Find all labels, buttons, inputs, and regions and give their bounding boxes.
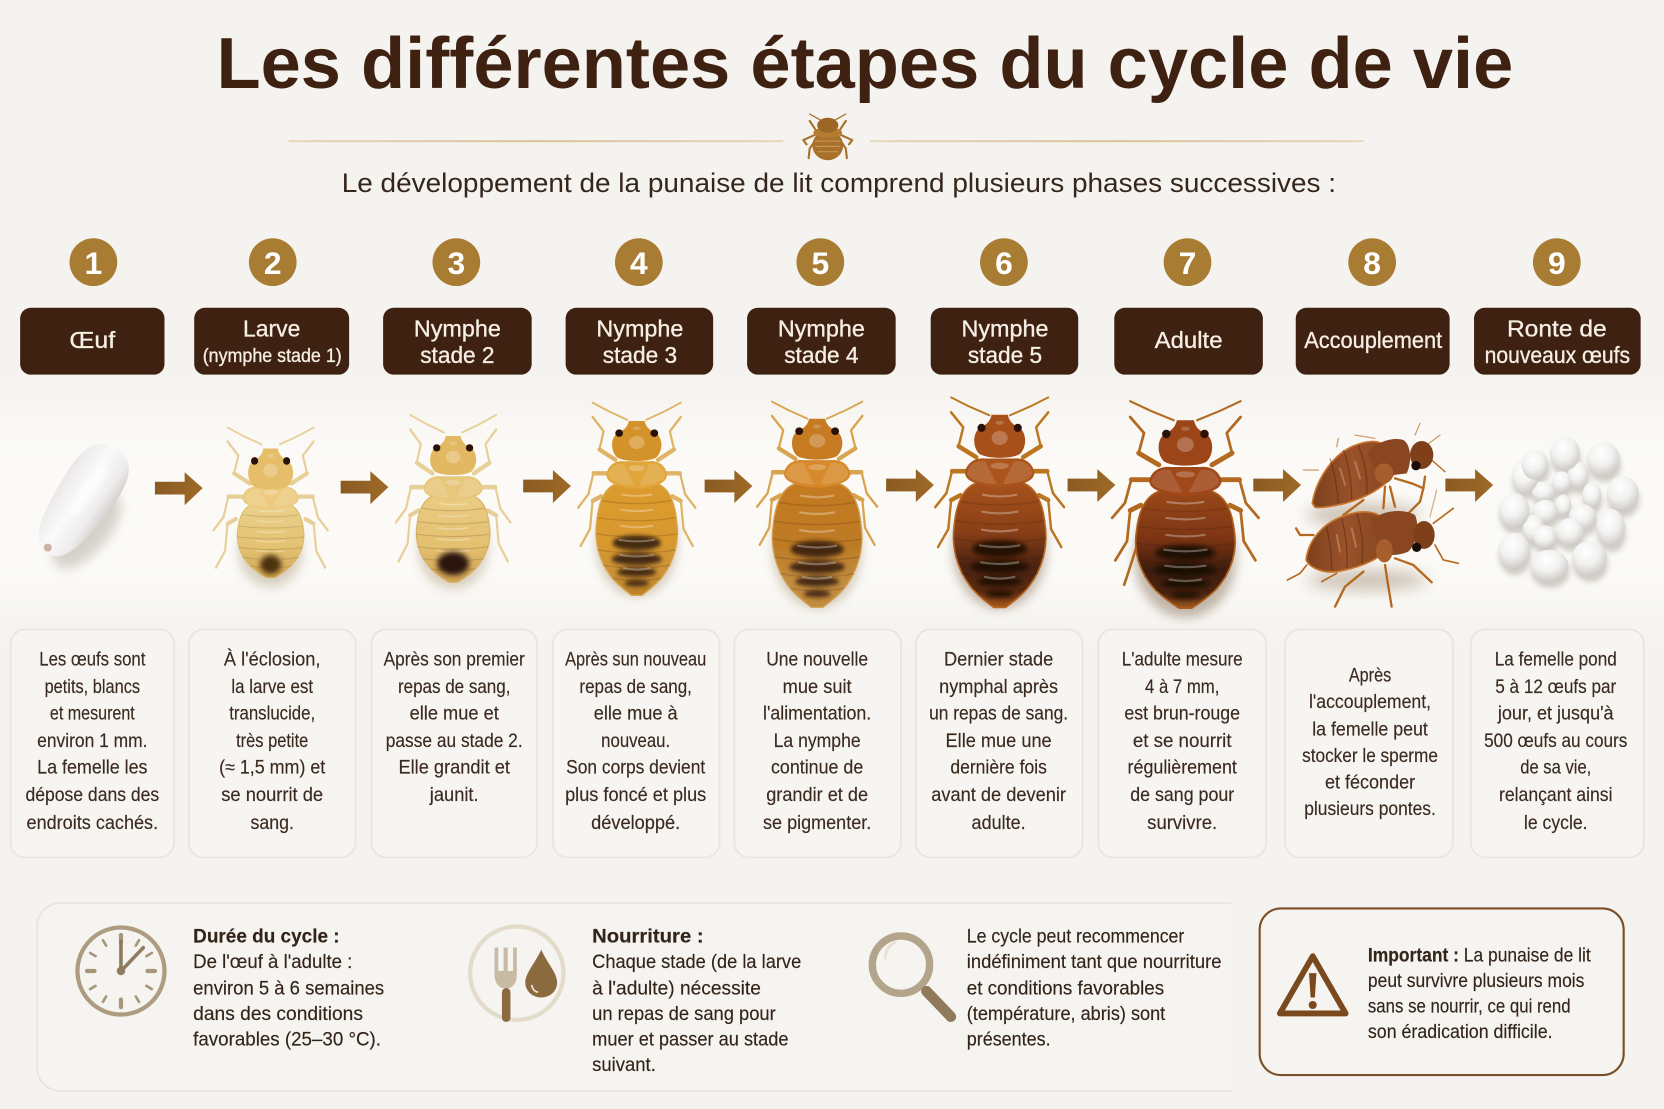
image: egg cluster <box>1498 436 1640 588</box>
panel: card nymphe stade 2: passe au stade 2. <box>386 731 523 752</box>
panel: card nymphe stade 2: jaunit. <box>429 785 479 806</box>
panel: card nymphe stade 3: Son corps devient <box>566 758 706 779</box>
label: nymphe stade 2: Nymphe <box>414 315 501 341</box>
text: nourriture: un repas de sang pour <box>592 1004 776 1025</box>
text: cycle recommence: présentes. <box>967 1029 1051 1050</box>
panel: card adulte <box>1098 629 1266 857</box>
panel: card larve: très petite <box>236 731 308 752</box>
panel: card oeuf: et mesurent <box>50 704 135 725</box>
text: important note: peut survivre plusieurs mois <box>1368 971 1584 992</box>
step numbers: 7 <box>1179 245 1196 281</box>
label: nymphe stade 5: Nymphe <box>961 315 1048 341</box>
label: adulte <box>1114 308 1263 375</box>
image: nymph stage 2 <box>396 415 510 589</box>
panel: card oeuf: Les œufs sont <box>39 649 146 670</box>
step numbers: 9 <box>1548 245 1566 281</box>
label: nymphe stade 3 <box>566 308 713 375</box>
panel: card nymphe stade 5 <box>916 629 1082 857</box>
divider with bug icon <box>289 114 1364 160</box>
panel: card nymphe stade 2 <box>371 629 537 857</box>
icon: fork and blood drop <box>470 926 564 1022</box>
label: ponte <box>1474 308 1641 375</box>
panel: card larve: (≈ 1,5 mm) et <box>219 758 326 779</box>
label: nymphe stade 4: stade 4 <box>784 342 859 368</box>
panel: card nymphe stade 3 <box>553 629 720 857</box>
panel: card nymphe stade 4: se pigmenter. <box>763 813 871 834</box>
panel: card nymphe stade 5: nymphal après <box>939 677 1058 698</box>
label: larve <box>194 308 349 375</box>
panel: card nymphe stade 2: repas de sang, <box>398 677 510 698</box>
icon: warning triangle <box>1280 956 1346 1013</box>
panel: card nymphe stade 3: plus foncé et plus <box>565 785 706 806</box>
panel: card adulte: 4 à 7 mm, <box>1145 677 1219 698</box>
image: nymph stage 4 <box>757 402 877 608</box>
panel: card larve: la larve est <box>231 677 314 698</box>
icon: magnifying glass <box>872 936 951 1017</box>
image: egg <box>23 433 140 580</box>
top bug body <box>1312 439 1433 508</box>
text: nourriture: suivant. <box>592 1055 656 1076</box>
panel: card accouplement: stocker le sperme <box>1302 746 1438 767</box>
step numbers: 3 <box>447 245 465 281</box>
panel: card nymphe stade 5: Elle mue une <box>946 731 1052 752</box>
text: durée du cycle: dans des conditions <box>193 1004 363 1025</box>
panel: card nymphe stade 5: avant de devenir <box>931 785 1067 806</box>
step numbers: 8 <box>1363 245 1381 281</box>
panel: card ponte: de sa vie, <box>1520 758 1591 779</box>
arrows between stages <box>155 469 1493 505</box>
label: ponte: Ronte de <box>1507 315 1607 341</box>
panel: card accouplement: et féconder <box>1325 772 1416 793</box>
label: ponte: nouveaux œufs <box>1485 342 1630 368</box>
label: nymphe stade 2: stade 2 <box>420 342 495 368</box>
panel: card nymphe stade 2: Elle grandit et <box>398 758 511 779</box>
label: adulte: Adulte <box>1155 327 1223 353</box>
panel: card nymphe stade 3: développé. <box>591 813 680 834</box>
panel: card accouplement: plusieurs pontes. <box>1304 799 1436 820</box>
panel: card larve: À l'éclosion, <box>224 649 320 670</box>
text: nourriture: à l'adulte) nécessite <box>592 978 761 999</box>
label: nymphe stade 5 <box>931 308 1078 375</box>
label: larve: Larve <box>243 315 300 341</box>
panel: card nymphe stade 4 <box>734 629 901 857</box>
stage name labels <box>20 308 1641 375</box>
panel: card accouplement <box>1285 629 1453 857</box>
text: cycle recommence: Le cycle peut recommencer <box>967 926 1185 947</box>
panel: card nymphe stade 5: Dernier stade <box>944 649 1053 670</box>
text: cycle recommence: (température, abris) sont <box>967 1004 1166 1025</box>
text: important note <box>1368 945 1591 1043</box>
label: oeuf: Œuf <box>70 327 116 353</box>
label: nymphe stade 4: Nymphe <box>778 315 865 341</box>
panel: card nymphe stade 3: nouveau. <box>601 731 670 752</box>
image: larva <box>213 428 328 587</box>
label: oeuf <box>20 308 164 375</box>
text: important note: sans se nourrir, ce qui rend <box>1368 996 1571 1017</box>
panel: bottom information frame <box>37 903 1231 1091</box>
step numbers: 4 <box>630 245 648 281</box>
text: nourriture: muer et passer au stade <box>592 1029 788 1050</box>
panel: card larve: se nourrit de <box>221 785 323 806</box>
text: nourriture: Nourriture : <box>592 926 704 947</box>
panel: card nymphe stade 3: Après sun nouveau <box>565 649 706 670</box>
panel: card nymphe stade 4: Une nouvelle <box>766 649 868 670</box>
panel: card nymphe stade 4: l'alimentation. <box>763 704 871 725</box>
panel: card accouplement: la femelle peut <box>1312 719 1429 740</box>
panel: card ponte: le cycle. <box>1524 813 1588 834</box>
panel: card oeuf: dépose dans des <box>25 785 159 806</box>
panel: card nymphe stade 4: La nymphe <box>774 731 861 752</box>
panel: card nymphe stade 2: Après son premier <box>384 649 525 670</box>
panel: card adulte: de sang pour <box>1130 785 1235 806</box>
panel: card ponte: La femelle pond <box>1495 649 1617 670</box>
text: nourriture: Chaque stade (de la larve <box>592 952 801 973</box>
text: important note: Important : La punaise de lit <box>1368 945 1591 966</box>
panel: card nymphe stade 5: un repas de sang. <box>929 704 1068 725</box>
panel: card oeuf: La femelle les <box>37 758 148 779</box>
panel: card oeuf <box>11 629 174 857</box>
panel: card oeuf: environ 1 mm. <box>37 731 148 752</box>
panel: card nymphe stade 3: repas de sang, <box>579 677 692 698</box>
panel: important callout <box>1260 908 1624 1075</box>
panel: card adulte: survivre. <box>1147 813 1217 834</box>
text: durée du cycle: Durée du cycle : <box>193 926 340 947</box>
panel: card adulte: régulièrement <box>1128 758 1238 779</box>
panel: card accouplement: l'accouplement, <box>1309 692 1431 713</box>
step numbers: 2 <box>264 245 282 281</box>
text: cycle recommence: indéfiniment tant que nourriture <box>967 952 1221 973</box>
label: nymphe stade 4 <box>747 308 896 375</box>
text: durée du cycle <box>193 926 384 1050</box>
panel: card accouplement: Après <box>1349 665 1391 686</box>
panel: card ponte: 500 œufs au cours <box>1484 731 1627 752</box>
step numbers <box>70 238 1581 286</box>
label: accouplement <box>1296 308 1450 375</box>
label: larve: (nymphe stade 1) <box>203 346 342 367</box>
panel: card nymphe stade 2: elle mue et <box>410 704 499 725</box>
bottom bug body <box>1306 511 1435 572</box>
image: nymph stage 3 <box>578 403 695 596</box>
text: durée du cycle: De l'œuf à l'adulte : <box>193 952 352 973</box>
label: nymphe stade 5: stade 5 <box>968 342 1042 368</box>
panel: card nymphe stade 4: mue suit <box>783 677 852 698</box>
label: nymphe stade 3: Nymphe <box>596 315 683 341</box>
step numbers: 6 <box>995 245 1013 281</box>
text: durée du cycle: environ 5 à 6 semaines <box>193 978 384 999</box>
panel: card ponte <box>1471 629 1644 857</box>
step numbers: 5 <box>811 245 829 281</box>
step numbers: 1 <box>85 245 102 281</box>
subtitle: Le développement de la punaise de lit comprend plusieurs phases successives : <box>342 168 1336 198</box>
panel: card adulte: est brun-rouge <box>1124 704 1240 725</box>
panel: card nymphe stade 5: dernière fois <box>950 758 1047 779</box>
panel: card nymphe stade 4: continue de <box>771 758 863 779</box>
panel: card nymphe stade 3: elle mue à <box>594 704 678 725</box>
image: nymph stage 5 <box>935 397 1064 609</box>
icon: clock <box>77 928 164 1015</box>
image: adult <box>1112 401 1259 618</box>
label: nymphe stade 3: stade 3 <box>603 342 677 368</box>
panel: card ponte: 5 à 12 œufs par <box>1495 677 1617 698</box>
text: durée du cycle: favorables (25–30 °C). <box>193 1029 381 1050</box>
panel: card nymphe stade 5: adulte. <box>972 813 1026 834</box>
panel: card ponte: jour, et jusqu'à <box>1497 704 1614 725</box>
panel: card oeuf: endroits cachés. <box>27 813 158 834</box>
panel: card adulte: L'adulte mesure <box>1122 649 1243 670</box>
panel: card adulte: et se nourrit <box>1133 731 1232 752</box>
panel: card oeuf: petits, blancs <box>45 677 140 698</box>
text: cycle recommence <box>967 926 1221 1050</box>
text: nourriture <box>592 926 801 1076</box>
panel: card nymphe stade 4: grandir et de <box>766 785 868 806</box>
text: important note: son éradication difficile. <box>1368 1022 1553 1043</box>
label: nymphe stade 2 <box>383 308 532 375</box>
label: accouplement: Accouplement <box>1304 327 1443 353</box>
text: cycle recommence: et conditions favorables <box>967 978 1164 999</box>
image: mating bugs <box>1287 423 1458 607</box>
title: Les différentes étapes du cycle de vie <box>216 24 1513 104</box>
panel: card larve: sang. <box>250 813 294 834</box>
panel: card larve: translucide, <box>229 704 315 725</box>
panel: card ponte: relançant ainsi <box>1499 785 1613 806</box>
panel: card larve <box>189 629 356 857</box>
